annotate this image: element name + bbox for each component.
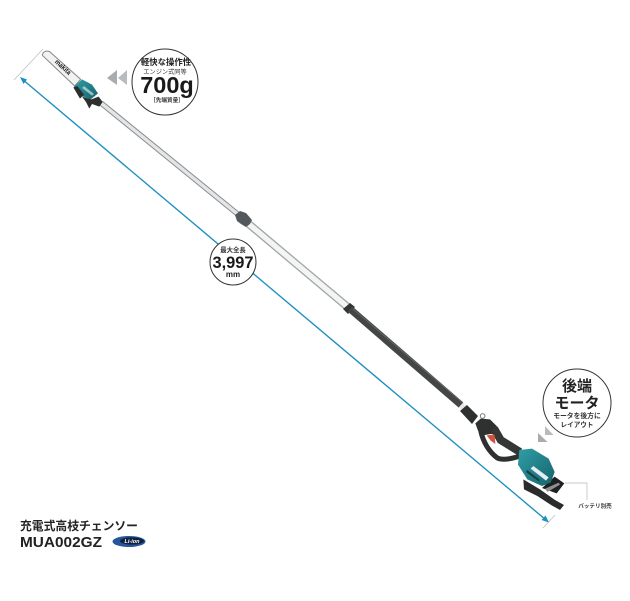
icon: Li-ion badge: Li-ion [125, 539, 140, 545]
badge: rear motor: モータを後方に [553, 411, 601, 420]
badge: light operation 700g: ［先端質量］ [150, 96, 184, 104]
battery callout line [565, 483, 587, 500]
badge: light operation 700g [132, 49, 198, 115]
chainsaw head with guide bar: makita [53, 59, 72, 77]
icon: Li-ion badge [112, 536, 146, 547]
badge: rear motor: 後端 [562, 377, 592, 395]
model number: MUA002GZ [20, 534, 102, 551]
icon: arrows toward rear motor [538, 426, 554, 442]
badge: light operation 700g: 軽快な操作性 [141, 57, 192, 67]
badge: rear motor: モータ [554, 395, 600, 412]
length dimension arrow [14, 49, 555, 528]
badge: rear motor: レイアウト [561, 420, 593, 429]
badge: maximum length 3,997 mm: 3,997 [212, 253, 254, 272]
badge: maximum length 3,997 mm [210, 239, 256, 285]
label: battery sold separately: バッテリ別売 [578, 502, 612, 510]
product name: 充電式高枝チェンソー [20, 519, 138, 533]
chainsaw head with guide bar [42, 51, 103, 109]
chainsaw pole: aluminium section [101, 103, 350, 309]
rear motor, handle and battery [475, 414, 564, 510]
badge: light operation 700g: エンジン式同等 [143, 68, 187, 76]
badge: light operation 700g: 700g [140, 72, 194, 98]
badge: maximum length 3,997 mm: 最大全長 [220, 245, 246, 254]
badge: rear motor [543, 369, 611, 437]
badge: maximum length 3,997 mm: mm [226, 270, 240, 279]
chainsaw pole: black section [343, 303, 478, 424]
icon: left-pointing arrows [107, 70, 127, 85]
